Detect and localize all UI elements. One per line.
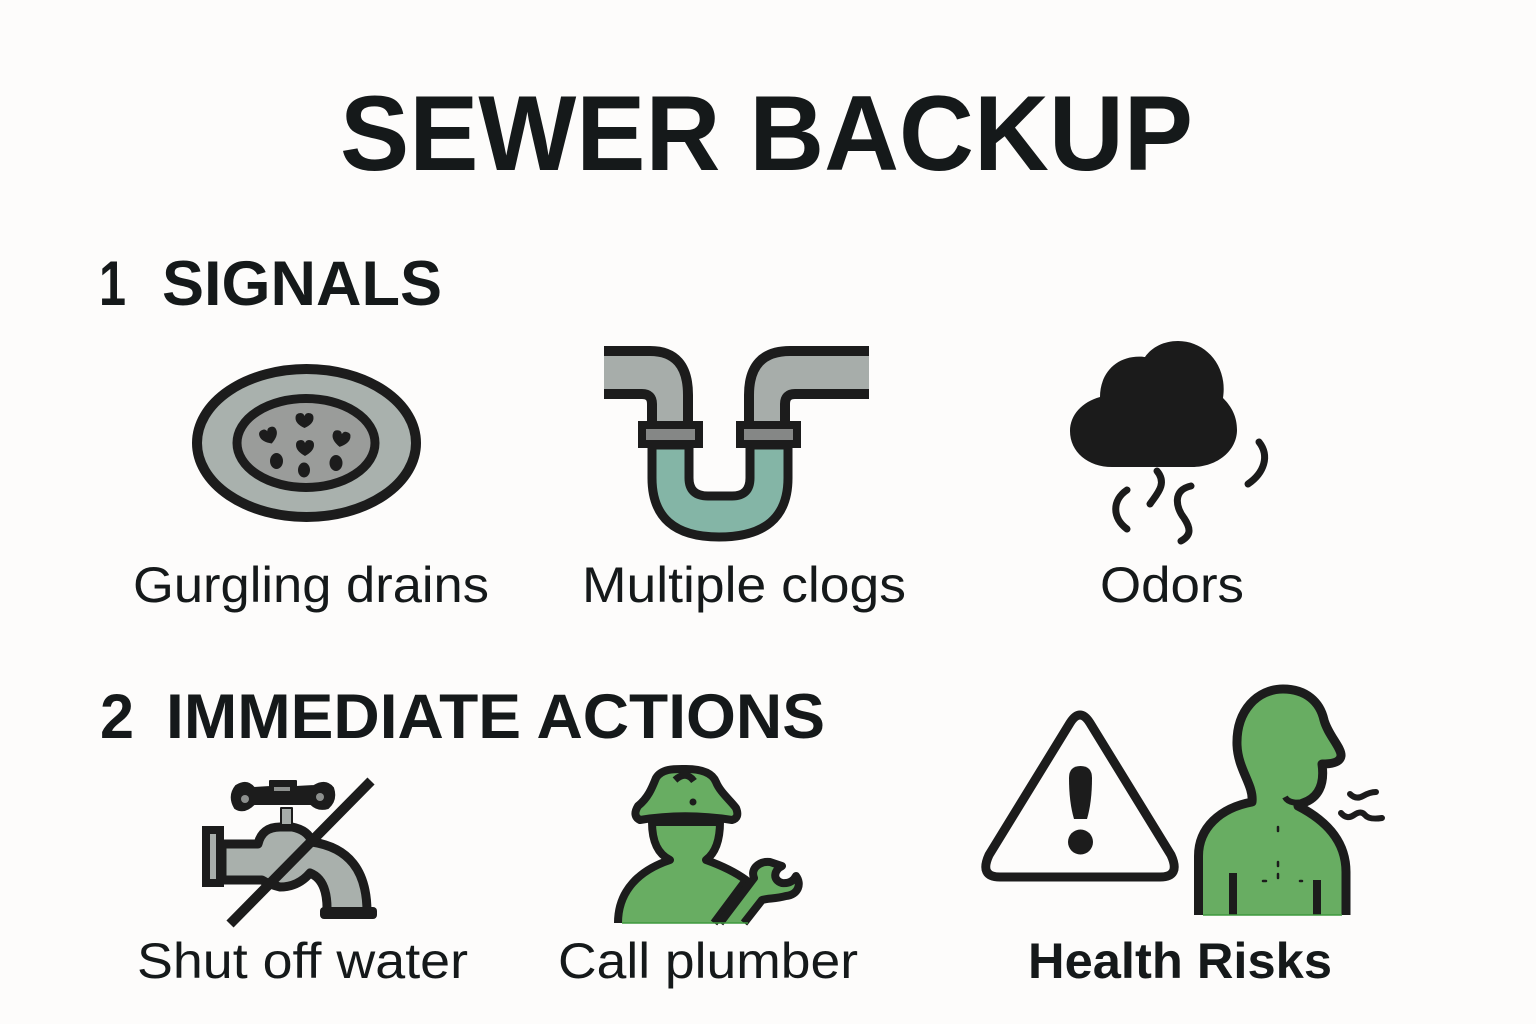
icon: sick person <box>1198 689 1382 915</box>
icon: plumber with wrench <box>618 769 799 923</box>
label: call plumber: Call plumber <box>558 933 858 989</box>
heading: 2 immediate actions: 2 <box>100 682 134 752</box>
icon: odor cloud <box>1070 341 1265 541</box>
title: SEWER BACKUP <box>340 73 1193 193</box>
icon: gurgling drain <box>197 369 416 517</box>
icon: p-trap pipe with clogs <box>604 351 869 537</box>
heading: 2 immediate actions: IMMEDIATE ACTIONS <box>166 682 825 752</box>
label: odors: Odors <box>1100 557 1244 613</box>
label: gurgling drains: Gurgling drains <box>133 557 489 613</box>
label: health risks: Health Risks <box>1028 933 1332 989</box>
label: multiple clogs: Multiple clogs <box>582 557 906 613</box>
heading: 1 signals: 1 <box>99 249 126 319</box>
icon: warning triangle <box>986 715 1174 877</box>
heading: 1 signals: SIGNALS <box>162 249 442 319</box>
label: shut off water: Shut off water <box>137 933 468 989</box>
icon: shut off water faucet <box>206 781 377 924</box>
